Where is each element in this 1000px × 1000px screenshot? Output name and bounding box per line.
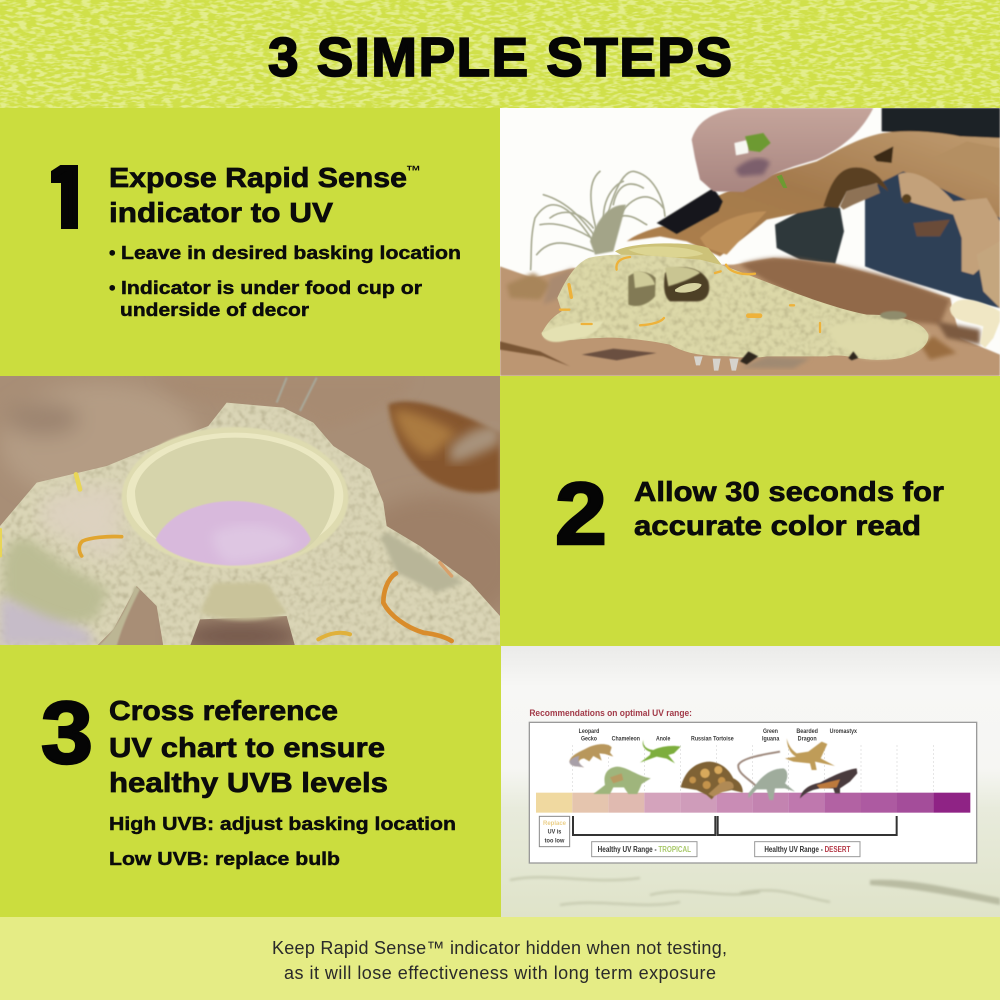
desert bracket <box>718 816 897 835</box>
tropical bracket <box>573 816 715 835</box>
animal labels: Green <box>763 728 778 735</box>
chart title: Recommendations on optimal UV range: <box>529 708 692 718</box>
footer note: Keep Rapid Sense™ indicator hidden when not testing, <box>272 938 727 958</box>
icon: uromastyx <box>800 768 857 798</box>
air plant <box>531 171 665 270</box>
step 3 notes: Low UVB: replace bulb <box>109 848 340 869</box>
food cup <box>122 427 348 568</box>
chart frame <box>529 722 977 863</box>
skull <box>615 243 722 265</box>
UV range chart <box>529 708 977 863</box>
icon: green iguana <box>738 752 795 800</box>
icon: leopard gecko <box>569 744 613 767</box>
animal labels: Chameleon <box>612 735 640 742</box>
hand <box>692 108 873 192</box>
step 1 bullets: underside of decor <box>120 299 309 320</box>
step 3 heading: healthy UVB levels <box>109 767 388 798</box>
panel: step 2 <box>500 376 1000 646</box>
icon: chameleon <box>593 767 651 794</box>
blurred leaf <box>388 401 500 493</box>
animal labels: Leopard <box>579 728 599 735</box>
step 1 bullets: Indicator is under food cup or <box>121 277 422 298</box>
step number 1: 1 <box>43 149 93 249</box>
footer note: as it will lose effectiveness with long term exposure <box>284 963 716 983</box>
legs shadows <box>98 586 140 646</box>
step 3 heading <box>109 695 388 798</box>
step 2 text <box>634 476 944 541</box>
icon: anole <box>640 740 681 763</box>
step 1 heading: Expose Rapid Sense <box>109 162 407 193</box>
replace box: too low <box>545 838 565 845</box>
title: 3 SIMPLE STEPS <box>268 26 732 88</box>
desert label: Healthy UV Range - DESERT <box>764 845 850 854</box>
replace box: Replace <box>543 820 566 827</box>
replace box: UV is <box>548 829 562 836</box>
step 1 bullets: • <box>109 242 115 263</box>
step 2 text: Allow 30 seconds for <box>634 476 944 507</box>
replace box <box>539 816 570 847</box>
icon: tortoise <box>681 762 743 799</box>
orange cracks <box>560 257 820 332</box>
panel: UV chart image background <box>501 646 1000 917</box>
icon: bearded dragon <box>785 738 835 770</box>
grey stems <box>277 378 317 411</box>
UV colour scale <box>536 793 970 813</box>
rock body <box>0 403 500 646</box>
step 1 heading <box>109 162 421 228</box>
animal labels: Gecko <box>581 735 597 742</box>
step 1 heading: indicator to UV <box>109 197 334 228</box>
step 1 bullets: Leave in desired basking location <box>121 242 461 263</box>
animal labels: Russian Tortoise <box>691 735 734 742</box>
step 1 bullets: • <box>109 277 115 298</box>
tropical label: Healthy UV Range - TROPICAL <box>598 845 691 854</box>
animal labels: Anole <box>656 735 671 742</box>
step 2 text: accurate color read <box>634 510 921 541</box>
animal labels: Bearded <box>796 728 818 735</box>
eye sockets <box>628 272 656 306</box>
gecko foot <box>950 300 1000 348</box>
animal labels: Iguana <box>762 735 780 742</box>
orange cracks <box>1 474 452 641</box>
tropical label <box>592 842 697 857</box>
panel: step 1 <box>51 165 460 316</box>
panel: step 3 <box>0 646 501 917</box>
nostril <box>880 311 907 320</box>
animal labels <box>579 728 857 742</box>
footer note <box>0 917 1000 1000</box>
step number 2: 2 <box>555 465 607 563</box>
step 1 heading: ™ <box>406 163 421 180</box>
photo: hand placing food on skull decor <box>500 108 1000 376</box>
purple indicator <box>156 501 311 565</box>
animal labels: Uromastyx <box>830 728 857 735</box>
teeth <box>694 356 739 371</box>
step number 3: 3 <box>41 684 93 782</box>
step 1 bullets <box>109 242 461 320</box>
black tongs <box>657 188 723 234</box>
step 3 notes <box>109 813 456 869</box>
photo: food cup with purple UV indicator <box>0 376 520 653</box>
step 3 notes: High UVB: adjust basking location <box>109 813 456 834</box>
desert label <box>755 842 860 857</box>
step 3 heading: Cross reference <box>109 695 338 726</box>
animal labels: Dragon <box>798 735 817 742</box>
step 3 heading: UV chart to ensure <box>109 732 385 763</box>
sand <box>500 258 1000 376</box>
top banner background <box>0 0 1000 108</box>
